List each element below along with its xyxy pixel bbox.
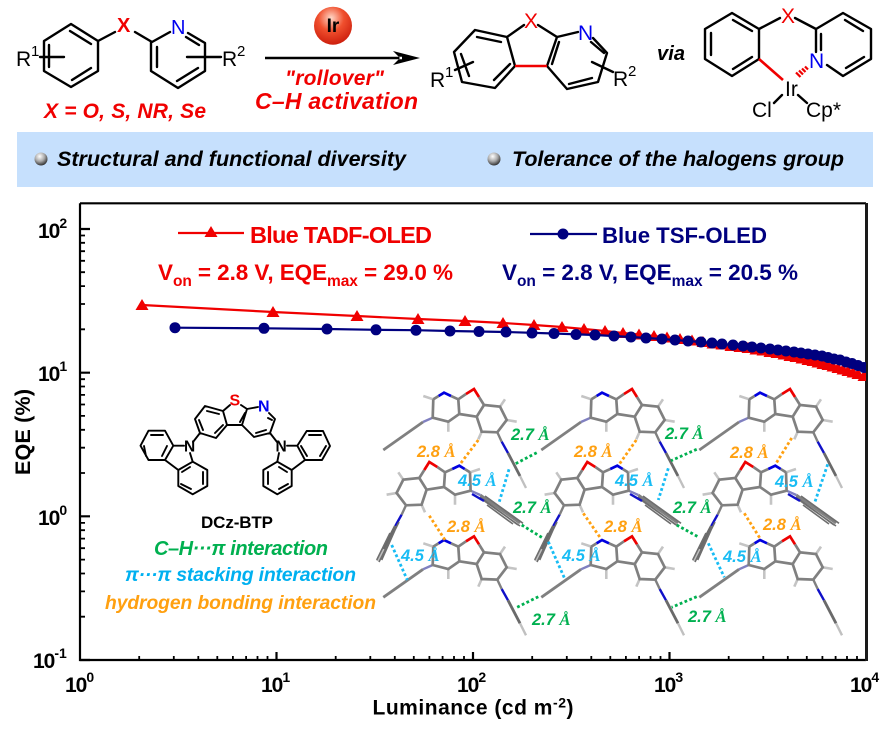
panel: features band [17, 132, 873, 187]
iridacycle intermediate: X [781, 5, 795, 28]
TSF metrics: V [502, 260, 517, 285]
distance labels: 2.8: 2.8 Å [573, 442, 613, 461]
x axis labels: 10 [850, 674, 871, 697]
rollover label: "rollover" [285, 67, 385, 90]
legend: TADF: Blue TADF-OLED [250, 222, 432, 248]
substrate molecule: R [16, 48, 31, 71]
via label: via [657, 43, 685, 65]
TSF metrics: max [672, 273, 703, 290]
distance labels: 2.7: 2.7 Å [672, 498, 712, 517]
y axis labels: 10 [38, 220, 59, 243]
product molecule: X [524, 10, 538, 33]
crystal packing diagram [377, 389, 842, 635]
TSF data series [175, 328, 865, 368]
x axis labels [65, 669, 879, 697]
distance labels: 2.8 [416, 442, 802, 536]
substrate molecule: 2 [237, 43, 245, 60]
hydrogen bond contacts [429, 438, 792, 540]
substrate scope label: X = O, S, NR, Se [43, 100, 206, 123]
TADF metrics: = 29.0 % [358, 260, 453, 285]
distance labels: 4.5: 4.5 Å [561, 546, 601, 565]
distance labels: 2.7 [510, 424, 727, 629]
x axis labels: 10 [65, 674, 86, 697]
substrate molecule: R [222, 48, 237, 71]
reaction arrow [265, 51, 420, 65]
compound name: DCz-BTP [201, 513, 273, 532]
legend: TSF: Blue TSF-OLED [602, 223, 767, 248]
DCz-BTP structure: N [184, 438, 195, 456]
distance labels: 2.8: 2.8 Å [446, 517, 486, 536]
distance labels: 2.7: 2.7 Å [512, 498, 552, 517]
product molecule: 1 [445, 64, 453, 81]
TADF metrics: max [327, 273, 358, 290]
bullet: structural diversity [34, 152, 48, 166]
y axis labels [33, 215, 67, 673]
distance labels: 2.7: 2.7 Å [664, 424, 704, 443]
y axis labels: -1 [54, 645, 67, 661]
y axis labels: 1 [59, 358, 67, 374]
substrate molecule: N [171, 17, 185, 39]
distance labels: 4.5: 4.5 Å [400, 546, 440, 565]
iridium catalyst badge [314, 7, 352, 45]
product molecule: R [613, 68, 628, 91]
distance labels: 2.8: 2.8 Å [603, 517, 643, 536]
substrate molecule: X [117, 15, 131, 37]
TADF metrics: on [173, 273, 192, 290]
distance labels: 2.8: 2.8 Å [729, 443, 769, 462]
TADF metrics: V [158, 260, 173, 285]
distance labels: 2.7: 2.7 Å [510, 425, 550, 444]
y axis labels: 10 [38, 507, 59, 530]
pi stacking contacts [392, 464, 828, 580]
x axis labels: 2 [478, 669, 486, 685]
legend: C-H pi interaction: C–H···π interaction [154, 538, 328, 560]
iridacycle intermediate: Cl [752, 99, 772, 122]
iridacycle intermediate: N [809, 50, 824, 73]
distance labels: 2.7: 2.7 Å [531, 610, 571, 629]
DCz-BTP structure [140, 392, 330, 494]
legend: pi stacking interaction: π···π stacking interaction [125, 564, 356, 586]
TADF metrics: = 2.8 V, EQE [192, 260, 327, 285]
TADF data series [136, 299, 870, 381]
packing molecules [377, 389, 842, 635]
DCz-BTP structure: S [230, 392, 240, 410]
y axis title: EQE (%) [11, 389, 35, 475]
y axis labels: 0 [59, 502, 67, 518]
distance labels: 4.5: 4.5 Å [722, 547, 762, 566]
distance labels: 4.5: 4.5 Å [614, 471, 654, 490]
iridacycle intermediate [705, 5, 871, 122]
x axis labels: 10 [261, 674, 282, 697]
product molecule [430, 10, 636, 92]
x axis labels: 4 [871, 669, 879, 685]
bullet: halogen tolerance [488, 152, 500, 166]
iridacycle intermediate: Ir [785, 78, 798, 101]
distance labels: 2.8: 2.8 Å [762, 515, 802, 534]
legend: TSF [530, 223, 767, 248]
product molecule: 2 [628, 63, 636, 80]
y axis labels: 10 [33, 650, 54, 673]
panel: EQE luminance chart [11, 203, 879, 720]
y axis labels: 10 [38, 363, 59, 386]
iridacycle intermediate: Cp* [806, 99, 841, 122]
panel: reaction scheme [16, 5, 871, 123]
product molecule: N [578, 22, 593, 45]
distance labels: 2.8: 2.8 Å [416, 442, 456, 461]
iridium catalyst badge: Ir [327, 16, 340, 37]
TSF metrics: on [517, 273, 536, 290]
C-H activation label: C–H activation [255, 88, 418, 114]
TSF metrics: = 20.5 % [703, 260, 798, 285]
chart frame [80, 203, 866, 660]
x axis labels: 10 [654, 674, 675, 697]
substrate molecule: 1 [31, 43, 39, 60]
x axis labels: 3 [675, 669, 683, 685]
distance labels: 4.5: 4.5 Å [457, 471, 497, 490]
x axis labels: 10 [457, 674, 478, 697]
distance labels: 4.5: 4.5 Å [774, 472, 814, 491]
legend: hydrogen bonding interaction: hydrogen bonding interaction [105, 593, 376, 614]
distance labels: 2.7: 2.7 Å [687, 607, 727, 626]
x axis title: ) [566, 696, 574, 720]
feature text: structural diversity: Structural and functional diversity [57, 147, 407, 171]
TSF metrics: = 2.8 V, EQE [536, 260, 672, 285]
DCz-BTP structure: N [258, 398, 270, 416]
x axis title: -2 [553, 694, 566, 710]
y axis labels: 2 [59, 215, 67, 231]
product molecule: R [430, 69, 445, 92]
feature text: halogen tolerance: Tolerance of the halogens group [512, 147, 844, 171]
distance labels: 4.5 [400, 471, 814, 566]
C-H pi contacts [515, 449, 699, 608]
x axis title: Luminance (cd m [372, 696, 552, 720]
substrate molecule [16, 15, 245, 88]
x axis labels: 1 [282, 669, 290, 685]
x axis labels: 0 [86, 669, 94, 685]
DCz-BTP structure: N [276, 438, 287, 456]
